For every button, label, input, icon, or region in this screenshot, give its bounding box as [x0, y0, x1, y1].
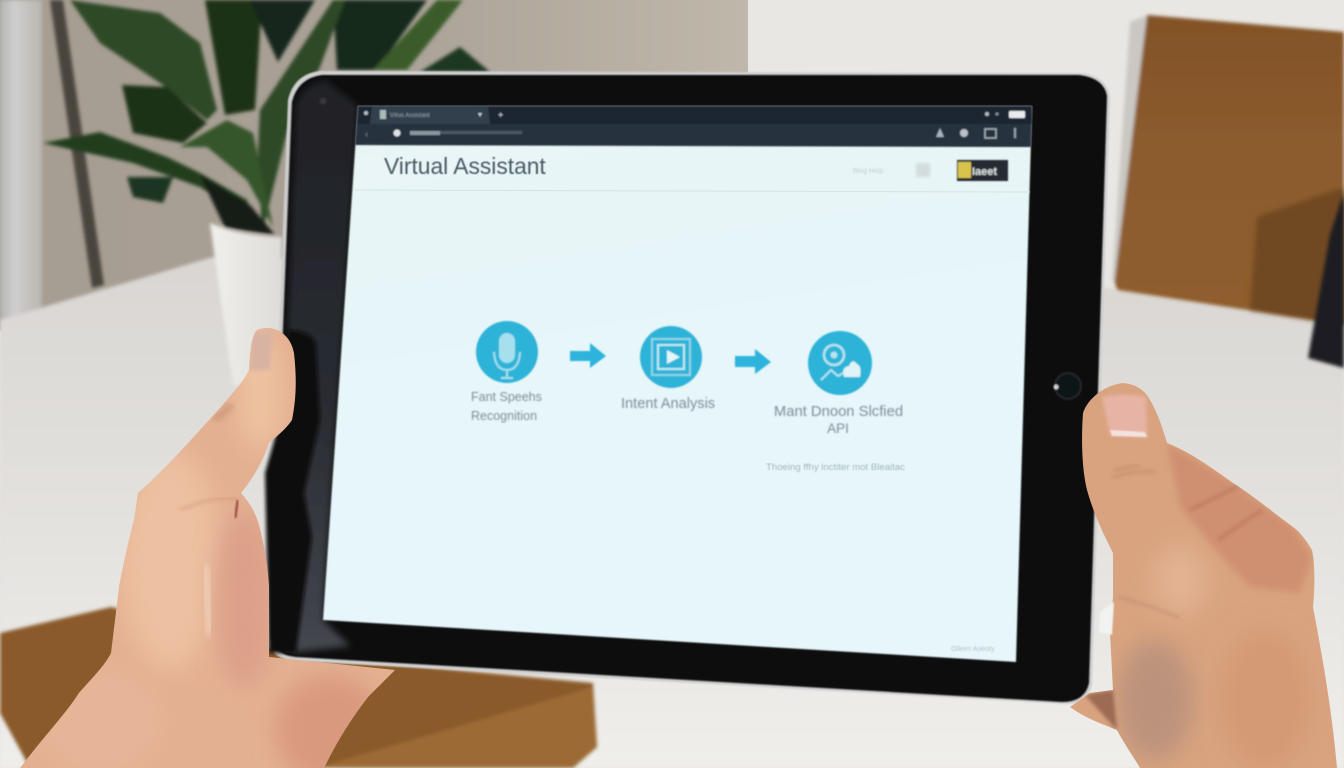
right hand — [1060, 370, 1344, 768]
plant pot — [210, 223, 282, 385]
icon: video frame — [640, 326, 702, 388]
arrow — [570, 343, 606, 368]
icon: camera — [320, 98, 326, 104]
address bar: ‹ — [365, 129, 368, 139]
tablet body — [267, 71, 1110, 704]
label: Intent Analysis — [621, 396, 715, 412]
browser chrome: + — [498, 110, 503, 120]
label: Mant Dnoon Slcfied — [774, 404, 903, 420]
step 1: speech recognition — [471, 321, 542, 423]
thumbnail — [249, 332, 273, 370]
title: Virtual Assistant — [384, 153, 546, 179]
footer note: Oileen Aoeoty — [951, 646, 995, 653]
fingers — [1167, 443, 1312, 593]
step 3: API: API — [827, 421, 849, 436]
table surface — [0, 257, 1344, 768]
gap between hand and tablet — [1099, 602, 1114, 635]
nav links: Blog Help — [853, 168, 883, 175]
caption: Thoeing ffhy inctiter mot Bleaitac — [766, 462, 905, 473]
browser tab — [370, 107, 490, 124]
header rule — [355, 190, 1030, 192]
icon: microphone — [476, 321, 538, 383]
arrow — [735, 349, 771, 374]
label: Fant Speehs — [471, 390, 542, 404]
wooden block lower left — [0, 607, 597, 768]
tablet edge reflection — [265, 330, 320, 653]
step 1: speech recognition: Recognition — [471, 409, 537, 423]
highlight — [205, 565, 210, 635]
logo badge — [957, 160, 1008, 181]
wooden board upper right — [1112, 15, 1344, 325]
left bezel shading — [276, 80, 358, 652]
status icons — [985, 112, 989, 116]
browser chrome: Vírus Assistant — [390, 113, 430, 119]
logo badge: Iaeet — [972, 166, 997, 178]
screen — [323, 106, 1032, 662]
plant — [43, 0, 490, 385]
icon: home button — [1054, 373, 1081, 399]
wall background — [0, 0, 1344, 330]
thumbnail — [1102, 394, 1147, 437]
knuckle creases — [1112, 465, 1156, 478]
step 3: API — [774, 331, 903, 436]
icon: gear and cloud — [808, 331, 872, 395]
dark frame right edge — [1308, 192, 1344, 368]
toolbar icons — [936, 128, 944, 137]
browser chrome — [355, 106, 1032, 147]
left hand — [20, 328, 395, 768]
step 2: intent analysis — [621, 326, 715, 412]
